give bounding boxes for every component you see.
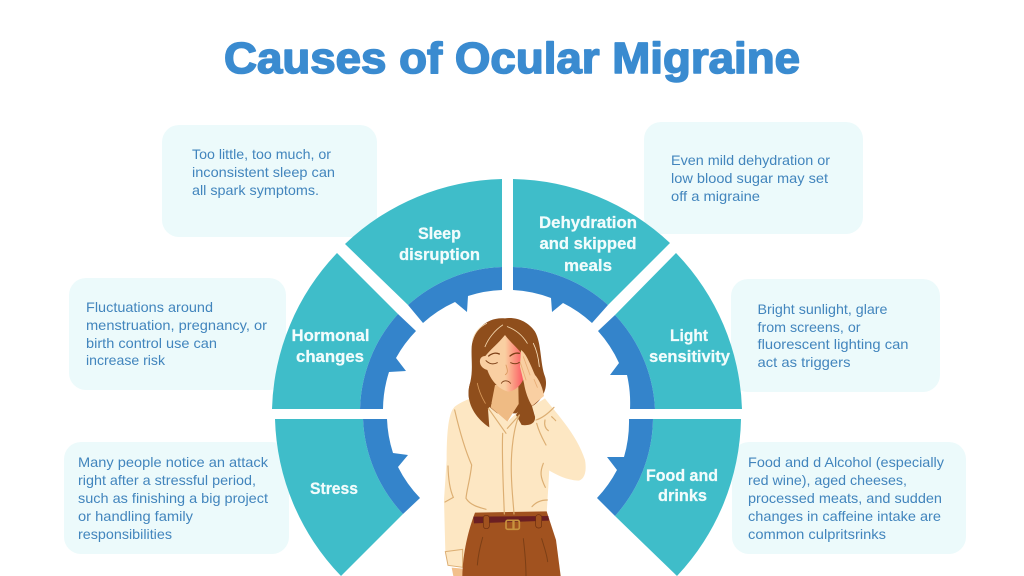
segment: dehydration and skipped meals: and skipped [540, 235, 636, 253]
sleeve [532, 398, 586, 481]
segment: stress [275, 419, 420, 576]
panel: food and drinks description: processed meats, and sudden [748, 490, 942, 506]
panel: food and drinks description: red wine), aged cheeses, [748, 472, 907, 488]
panel: sleep disruption description: inconsistent sleep can [192, 164, 335, 180]
neck [491, 385, 519, 422]
facial features [486, 353, 520, 383]
belt [473, 516, 549, 523]
panel: dehydration description: Even mild dehydration or [671, 152, 830, 168]
panel: stress description: right after a stressful period, [78, 472, 256, 488]
panel: sleep disruption description [162, 125, 377, 237]
panel: light sensitivity description: from screens, or [758, 319, 861, 335]
segment: dehydration and skipped meals [513, 179, 670, 323]
panel: stress description: such as finishing a big project [78, 490, 268, 506]
segment: food and drinks: Food and [646, 467, 718, 485]
panel: hormonal changes description: Fluctuations around [86, 299, 213, 315]
segment: sleep disruption [345, 179, 502, 323]
panel: light sensitivity description: fluorescent lighting can [758, 336, 908, 352]
segment: hormonal changes [272, 253, 416, 409]
segment: light sensitivity: sensitivity [649, 348, 731, 366]
segment: dehydration and skipped meals: Dehydration [539, 214, 637, 232]
segment: food and drinks [597, 419, 741, 576]
panel: light sensitivity description [731, 279, 940, 392]
shirt folds [488, 408, 506, 433]
panel: hormonal changes description [69, 278, 286, 390]
hair strands [473, 323, 539, 403]
face [480, 335, 525, 392]
segment: sleep disruption: disruption [399, 246, 480, 264]
shirt body [444, 399, 549, 567]
segment: hormonal changes: changes [296, 348, 364, 366]
panel: light sensitivity description: Bright sunlight, glare [758, 301, 888, 317]
illustration: woman holding her head [444, 318, 586, 576]
panel: sleep disruption description: Too little, too much, or [192, 146, 331, 162]
pant folds [477, 537, 548, 576]
hand [520, 350, 544, 406]
segment: light sensitivity: Light [670, 327, 708, 345]
panel: dehydration description: low blood sugar may set [671, 170, 828, 186]
panel: stress description: or handling family [78, 508, 193, 524]
panel: light sensitivity description: act as triggers [758, 354, 850, 370]
panel: food and drinks description [732, 442, 966, 554]
left hand [452, 568, 463, 576]
panel: stress description [64, 442, 289, 554]
front hair locks [469, 367, 492, 427]
pants [462, 511, 561, 576]
panel: hormonal changes description: menstruation, pregnancy, or [86, 317, 267, 333]
cuff [445, 549, 463, 567]
segment: dehydration and skipped meals: meals [564, 257, 612, 275]
panel: stress description: Many people notice an attack [78, 454, 269, 470]
panel: stress description: responsibilities [78, 526, 172, 542]
title: Causes of Ocular Migraine [224, 35, 800, 83]
panel: dehydration description: off a migraine [671, 188, 760, 204]
panel: food and drinks description: common culpritsrinks [748, 526, 886, 542]
segment: sleep disruption: Sleep [418, 225, 461, 243]
segment: light sensitivity [598, 253, 742, 409]
segment: food and drinks: drinks [658, 487, 707, 505]
panel: dehydration description [644, 122, 863, 234]
segment: stress: Stress [310, 480, 358, 498]
panel: food and drinks description: Food and d Alcohol (especially [748, 454, 944, 470]
panel: food and drinks description: changes in caffeine intake are [748, 508, 941, 524]
segment: hormonal changes: Hormonal [292, 327, 370, 345]
panel: sleep disruption description: all spark symptoms. [192, 182, 319, 198]
panel: hormonal changes description: increase risk [86, 352, 166, 368]
panel: hormonal changes description: birth control use can [86, 335, 217, 351]
back hair [469, 318, 546, 427]
